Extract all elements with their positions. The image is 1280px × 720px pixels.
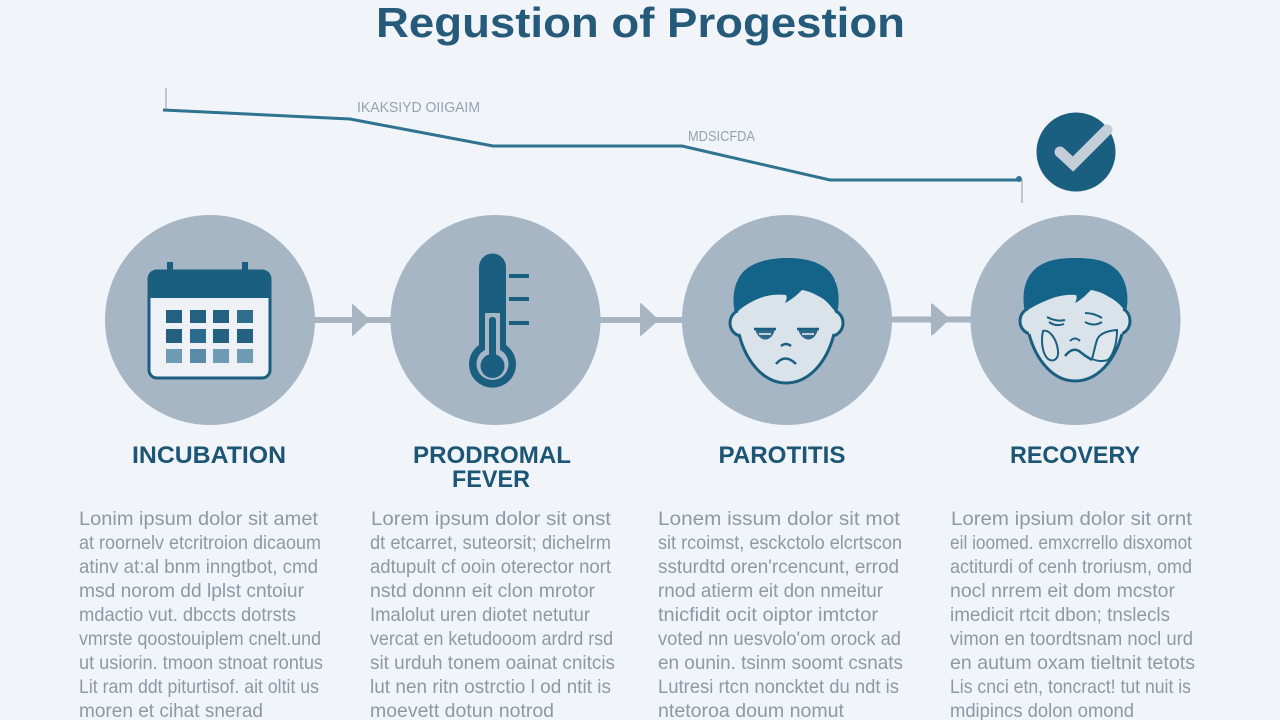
text block: parotitis: Lutresi rtcn noncktet du ndt is [658, 676, 899, 698]
text block: incubation: Lit ram ddt piturtisof. ait oltit us [79, 676, 319, 698]
text block: incubation: msd norom dd lplst cntoiur [79, 580, 304, 602]
text block: parotitis: tnicfidit ocit oiptor imtctor [658, 604, 879, 626]
text block: parotitis [658, 508, 903, 720]
text block: recovery: Lis cnci etn, toncract! tut nuit is [950, 676, 1191, 698]
text block: recovery: imedicit rtcit dbon; tnslecls [950, 604, 1170, 626]
swollen cheeks [1042, 331, 1058, 360]
text block: incubation [79, 508, 323, 720]
text block: prodromal fever: sit urduh tonem oainat cnitcis [370, 652, 615, 674]
heading: prodromal fever [413, 442, 571, 493]
icon: tired face [730, 258, 843, 383]
text block: parotitis: Lonem issum dolor sit mot [658, 508, 901, 530]
icon: recovery check badge [1036, 112, 1116, 192]
text block: recovery: nocl nrrem eit dom mcstor [950, 580, 1175, 602]
panel: recovery icon [970, 215, 1180, 425]
eyes and brows [1047, 317, 1065, 321]
text block: recovery [950, 508, 1195, 720]
panel: incubation icon [105, 215, 315, 425]
text block: parotitis: sit rcoimst, esckctolo elcrtscon [658, 532, 902, 554]
text block: prodromal fever: nstd donnn eit clon mrotor [370, 580, 595, 602]
text block: parotitis: ssturdtd oren'rcencunt, errod [658, 556, 899, 578]
text block: parotitis: voted nn uesvolo'om orock ad [658, 628, 901, 650]
timeline chart [163, 88, 1022, 203]
text block: prodromal fever: vercat en ketudooom ardrd rsd [370, 628, 613, 650]
heading: prodromal fever: PRODROMAL [413, 442, 571, 469]
eyes [755, 329, 775, 340]
text block: incubation: ut usiorin. tmoon stnoat rontus [79, 652, 323, 674]
text block: parotitis: en ounin. tsinm soomt csnats [658, 652, 903, 674]
text block: prodromal fever: lut nen ritn ostrctio l od ntit is [370, 676, 611, 698]
text block: prodromal fever: Lorem ipsum dolor sit onst [371, 508, 612, 530]
heading: prodromal fever: FEVER [452, 466, 530, 493]
heading: recovery: RECOVERY [1010, 442, 1140, 469]
connector arrow 2 [600, 303, 684, 336]
text block: incubation: Lonim ipsum dolor sit amet [79, 508, 319, 530]
icon: swollen face [1020, 258, 1130, 381]
text block: recovery: actiturdi of cenh troriusm, omd [950, 556, 1192, 578]
text block: prodromal fever: dt etcarret, suteorsit; dichelrm [370, 532, 611, 554]
nose and mouth [1070, 338, 1080, 341]
title: Regustion of Progestion [376, 0, 905, 46]
text block: recovery: Lorem ipsium dolor sit ornt [951, 508, 1193, 530]
connector arrow 1 [315, 304, 392, 336]
text block: prodromal fever: Imalolut uren diotet netutur [370, 604, 590, 626]
icon: thermometer [469, 254, 529, 388]
text block: prodromal fever [370, 508, 615, 720]
timeline label: first: IKAKSIYD OIIGAIM [357, 99, 480, 116]
text block: recovery: vimon en toordtsnam nocl urd [950, 628, 1193, 650]
panel: parotitis icon [682, 215, 892, 425]
connector arrow 3 [890, 304, 972, 336]
text block: incubation: mdactio vut. dbccts dotrsts [79, 604, 296, 626]
text block: prodromal fever: adtupult cf ooin oterector nort [370, 556, 612, 578]
text block: incubation: at roornelv etcritroion dicaoum [79, 532, 321, 554]
text block: parotitis: rnod atierm eit don nmeitur [658, 580, 883, 602]
heading: incubation: INCUBATION [132, 442, 286, 469]
panel: prodromal fever icon [390, 215, 600, 425]
timeline label: second: MDSICFDA [688, 128, 755, 145]
text block: incubation: vmrste qoostouiplem cnelt.und [79, 628, 321, 650]
heading: parotitis: PAROTITIS [718, 442, 846, 469]
text block: recovery: en autum oxam tieltnit tetots [950, 652, 1195, 674]
nose and mouth [781, 344, 791, 346]
text block: incubation: atinv at:al bnm inngtbot, cmd [79, 556, 318, 578]
text block: recovery: eil ioomed. emxcrrello disxomot [950, 532, 1193, 554]
icon: calendar [148, 262, 271, 378]
